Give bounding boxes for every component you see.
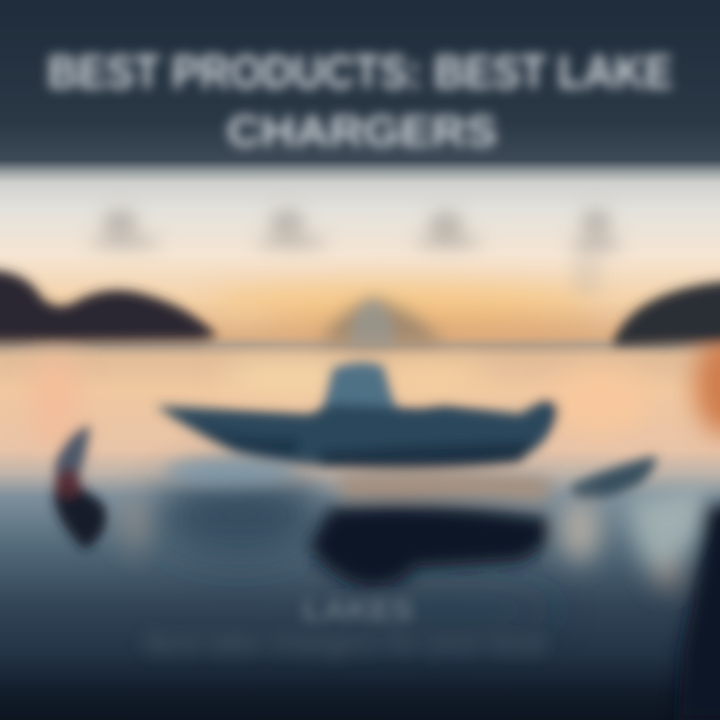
sunset glow on horizon [29, 284, 720, 448]
icon: feature 1 [89, 209, 161, 248]
caption text: Best lake chargers for your boat [145, 630, 545, 657]
right foreground dark post [678, 505, 720, 720]
icon: feature 3 [414, 211, 482, 248]
warm reflection under boat [338, 473, 550, 502]
boat cabin figure [322, 298, 398, 415]
left water dark reflection [155, 475, 560, 628]
light blue patch under hull [165, 458, 295, 486]
boat hull [156, 400, 558, 469]
icon: feature 2 [256, 209, 328, 248]
feature icons row [89, 209, 622, 295]
left oar [54, 425, 107, 550]
left hills silhouette [0, 270, 218, 342]
title: CHARGERS [227, 107, 497, 156]
right light patch [125, 485, 705, 591]
title [48, 45, 672, 156]
right paddle blade [571, 456, 656, 500]
caption heading: LAKES [303, 594, 413, 627]
icon: feature 4 [570, 209, 622, 295]
distant mountain behind boat [320, 298, 445, 344]
dark reflection centre [310, 506, 549, 587]
right hill silhouette [612, 280, 720, 346]
